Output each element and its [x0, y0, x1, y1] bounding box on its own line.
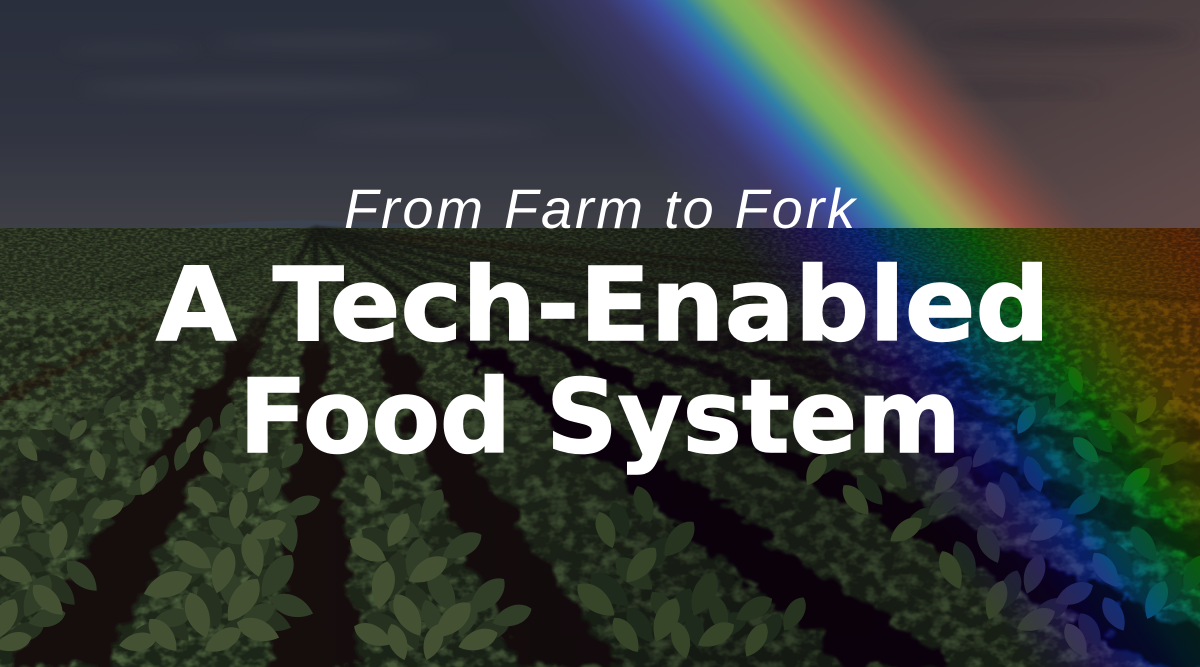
- title line 1: A Tech-Enabled: [156, 246, 1050, 365]
- rainbow in sky: [0, 0, 1200, 229]
- warm sky on the right: [760, 0, 1200, 229]
- far furrows near vanishing point: [100, 228, 1200, 340]
- sky: [0, 0, 1200, 229]
- distant hills: [170, 220, 500, 228]
- leaves: near rows: [0, 338, 1200, 663]
- clouds: [60, 37, 550, 135]
- foliage texture: [0, 228, 1200, 667]
- dark right side shading: [0, 228, 1200, 667]
- soybean field: [0, 228, 1200, 667]
- rainbow across field: [0, 228, 1200, 667]
- near furrows: [0, 288, 1200, 667]
- title line 2: Food System: [239, 358, 961, 477]
- subtitle: From Farm to Fork: [344, 177, 858, 240]
